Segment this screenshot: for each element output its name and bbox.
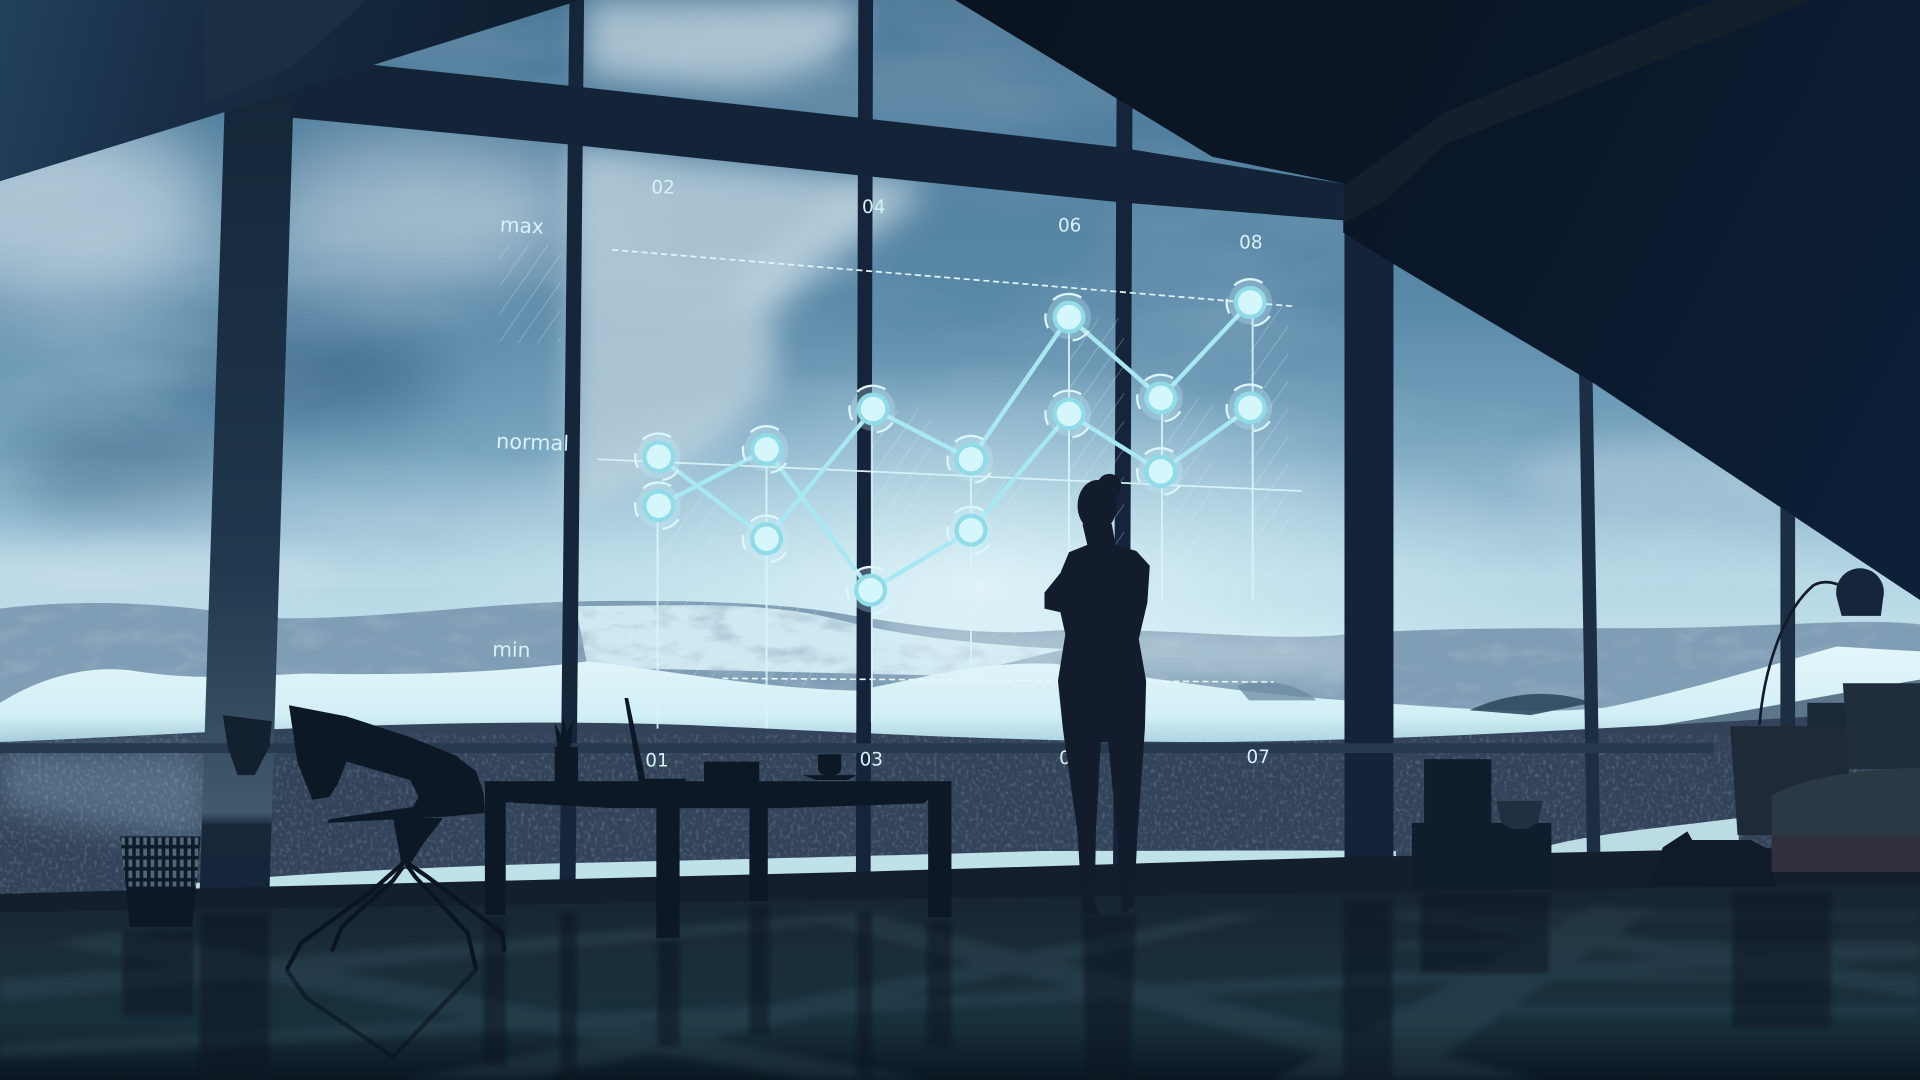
desk: [485, 698, 951, 938]
max dashed line: [612, 250, 1292, 306]
axis labels: normal: [496, 429, 569, 456]
cushions: [1843, 683, 1920, 769]
axis labels: [492, 177, 1270, 772]
axis labels: 03: [860, 749, 883, 770]
pen holder: [555, 716, 578, 781]
ceiling beam: [1343, 0, 1812, 223]
holographic chart: [492, 177, 1302, 772]
basket: [1496, 801, 1543, 829]
normal line: [598, 459, 1302, 491]
right mullion 1: [1578, 331, 1600, 857]
stacked books: [1648, 831, 1776, 887]
sofa and side table: [1730, 683, 1920, 872]
series line A: [659, 302, 1250, 539]
roof rafter: [202, 0, 367, 104]
forest foreground: [0, 710, 1920, 904]
hatched column areas: [500, 245, 1288, 686]
column: left: [200, 86, 294, 894]
axis labels: max: [499, 212, 545, 239]
mullion 2: [856, 0, 873, 877]
axis labels: min: [492, 637, 531, 662]
horizontal rail: [0, 743, 1714, 753]
floor lamp: [1760, 568, 1884, 725]
floor reflections: [122, 894, 1831, 1080]
storage boxes: [1412, 759, 1551, 889]
cup and saucer: [803, 754, 857, 780]
axis labels: 04: [862, 197, 885, 218]
left roof: [0, 0, 578, 181]
axis labels: 01: [645, 751, 669, 772]
axis labels: 06: [1058, 215, 1081, 236]
mullion 1: [560, 0, 584, 888]
right mullion 2: [1780, 453, 1795, 784]
data nodes: [635, 279, 1272, 613]
min dashed line: [722, 678, 1273, 682]
chair reflection: [287, 970, 476, 1057]
mountains: [0, 600, 1920, 742]
sofa: [1772, 768, 1920, 872]
side table: [1730, 726, 1849, 835]
sloped transom: [290, 65, 1343, 220]
right roof: [955, 0, 1920, 600]
floor light lattice: [0, 906, 1920, 1080]
axis labels: 05: [1059, 748, 1083, 769]
axis labels: 08: [1239, 233, 1263, 254]
series line B: [659, 408, 1250, 590]
mullion 3: [1113, 67, 1133, 869]
waste bin: [120, 836, 201, 927]
column: right: [1344, 208, 1393, 869]
vertical drop lines: [658, 302, 1253, 729]
desk box: [704, 762, 759, 782]
chair: [223, 705, 504, 970]
axis labels: 02: [651, 177, 675, 198]
axis labels: 07: [1247, 747, 1270, 768]
laptop: [624, 698, 686, 784]
woman silhouette: [1044, 474, 1150, 915]
floor: [0, 845, 1920, 1080]
